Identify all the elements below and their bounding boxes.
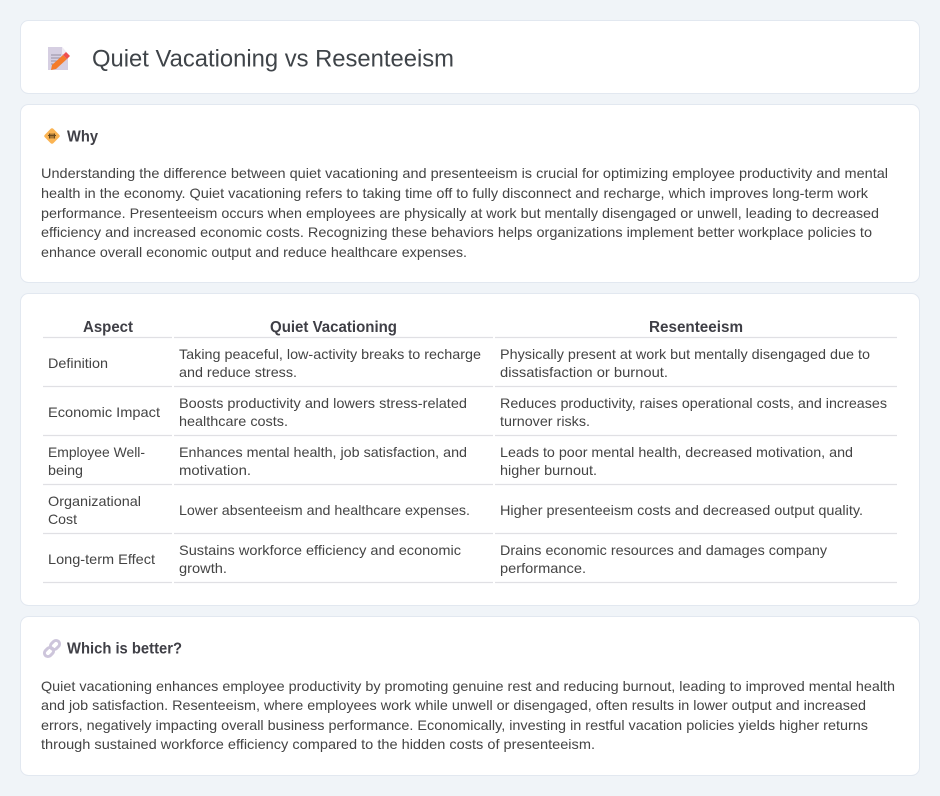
table row: employee well-being xyxy=(48,444,853,478)
table row: employee well-being: motivation. xyxy=(179,462,251,478)
title: Quiet Vacationing vs Resenteeism xyxy=(92,46,454,72)
table row: employee well-being: Leads to poor mental health, decreased motivation, and xyxy=(500,444,853,460)
table row: long-term effect: performance. xyxy=(500,560,586,576)
text block: why paragraph: health in the economy. Quiet vacationing refers to taking time off to fully disconnect and recharge, which improves long-term work xyxy=(41,185,869,201)
panel: title header xyxy=(20,20,920,94)
table row: definition: Physically present at work but mentally disengaged due to xyxy=(500,346,870,362)
table header row: Resenteeism xyxy=(649,319,743,336)
table header row: Aspect xyxy=(83,319,134,336)
panel: why xyxy=(20,104,920,282)
table row: employee well-being: higher burnout. xyxy=(500,462,597,478)
table row: economic impact: Economic Impact xyxy=(48,404,160,420)
table row: economic impact: turnover risks. xyxy=(500,413,590,429)
table row: organizational cost: Lower absenteeism and healthcare expenses. xyxy=(179,502,470,518)
table row: economic impact: Reduces productivity, raises operational costs, and increases xyxy=(500,395,887,411)
table row: long-term effect xyxy=(48,542,827,576)
table row: organizational cost xyxy=(48,493,863,527)
table header row: Quiet Vacationing xyxy=(270,319,397,336)
table row: economic impact: Boosts productivity and lowers stress-related xyxy=(179,395,467,411)
table row: definition: Taking peaceful, low-activity breaks to recharge xyxy=(179,346,481,362)
table row: organizational cost: Organizational xyxy=(48,493,141,509)
icon: link xyxy=(43,639,61,658)
table row: definition: dissatisfaction or burnout. xyxy=(500,364,668,380)
table row: definition: and reduce stress. xyxy=(179,364,297,380)
table row: employee well-being: being xyxy=(48,462,83,478)
text block: why paragraph: performance. Presenteeism occurs when employees are physically at work but mentally disengaged or unwell, leading to decreased xyxy=(41,205,879,221)
table row: organizational cost: Higher presenteeism costs and decreased output quality. xyxy=(500,502,863,518)
table row: employee well-being: Employee Well- xyxy=(48,444,145,460)
text block: why paragraph: Understanding the difference between quiet vacationing and presenteeism is crucial for optimizing employee productivity and mental xyxy=(41,165,888,181)
table row: long-term effect: growth. xyxy=(179,560,227,576)
text block: which is better paragraph: errors, negatively impacting overall business performance. Economically, investing in restful vacation policies yields higher returns xyxy=(41,717,868,733)
icon: diamond sign xyxy=(44,128,60,144)
text block: which is better paragraph: and job satisfaction. Resenteeism, where employees work while unwell or disengaged, often results in lower output and increased xyxy=(41,697,866,713)
heading: which is better: Which is better? xyxy=(67,640,182,658)
text block: which is better paragraph: Quiet vacationing enhances employee productivity by promoting genuine rest and reducing burnout, leading to improved mental health xyxy=(41,678,895,694)
table header row xyxy=(83,319,743,336)
table row: long-term effect: Drains economic resources and damages company xyxy=(500,542,827,558)
table row: organizational cost: Cost xyxy=(48,511,77,527)
table row: definition xyxy=(48,346,870,380)
text block: why paragraph xyxy=(41,165,888,260)
text block: which is better paragraph xyxy=(41,678,895,752)
table row: economic impact xyxy=(48,395,887,429)
table row: economic impact: healthcare costs. xyxy=(179,413,288,429)
heading: why: Why xyxy=(67,128,98,146)
table row: long-term effect: Long-term Effect xyxy=(48,551,155,567)
panel: which is better xyxy=(20,616,920,776)
table row: employee well-being: Enhances mental health, job satisfaction, and xyxy=(179,444,467,460)
panel: comparison table xyxy=(20,294,920,606)
table row: definition: Definition xyxy=(48,355,108,371)
icon: document with pencil xyxy=(48,47,70,70)
text block: which is better paragraph: through sustained workforce efficiency compared to the hidden costs of presenteeism. xyxy=(41,736,595,752)
text block: why paragraph: efficiency and increased economic costs. Recognizing these behaviors helps organizations implement better workplace policies to xyxy=(41,224,872,240)
text block: why paragraph: enhance overall economic output and reduce healthcare expenses. xyxy=(41,244,467,260)
table row: long-term effect: Sustains workforce efficiency and economic xyxy=(179,542,461,558)
